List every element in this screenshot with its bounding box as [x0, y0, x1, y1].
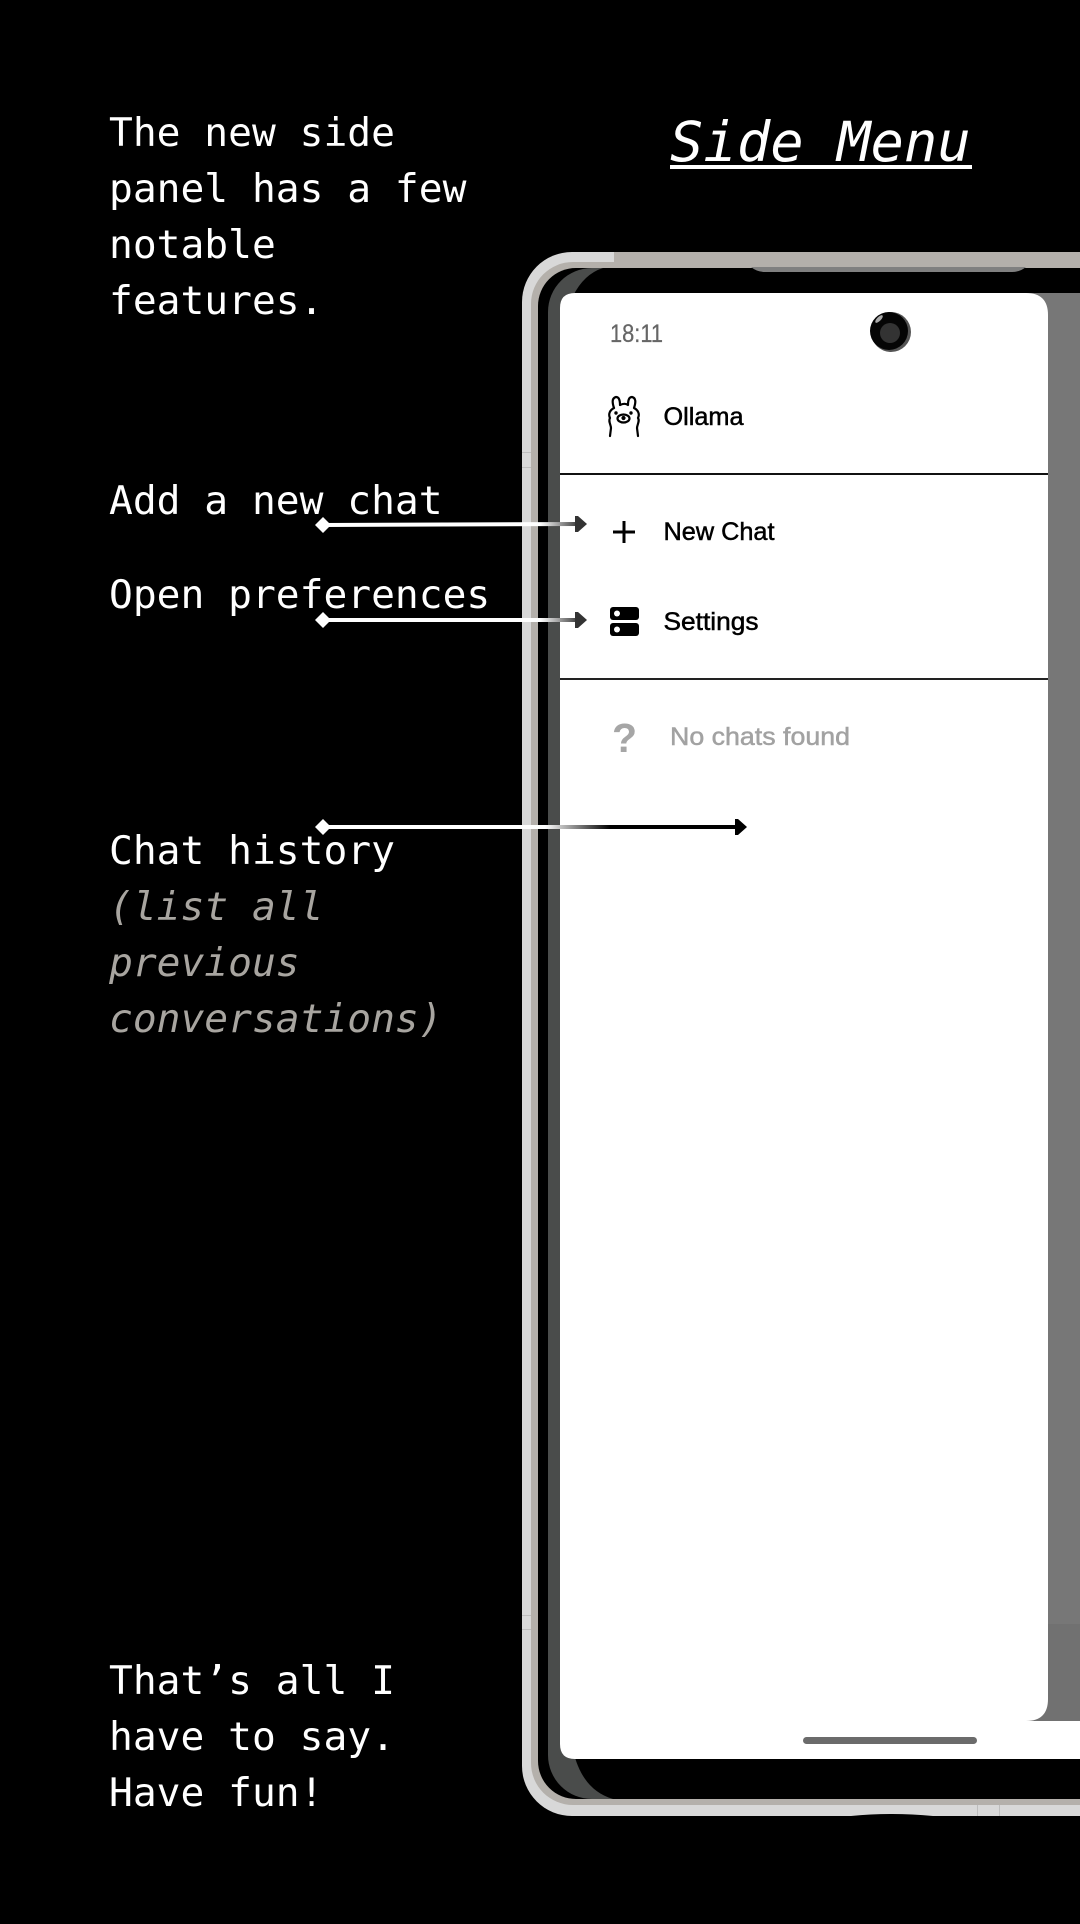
icon: settings [610, 607, 639, 636]
settings label: Settings [664, 608, 758, 636]
home indicator [803, 1737, 977, 1744]
side panel [560, 293, 1048, 1759]
annotation: open preferences: Open preferences [109, 572, 490, 618]
empty state label: No chats found [670, 723, 850, 751]
phone frame [522, 252, 1080, 1816]
divider [560, 473, 1048, 475]
annotation: add a new chat: Add a new chat [109, 478, 443, 524]
status bar time: 18:11 [610, 320, 663, 348]
annotation: chat history: previous [108, 940, 300, 986]
closing text block: have to say. [109, 1714, 395, 1760]
intro text block: features. [109, 278, 323, 324]
annotation: chat history: Chat history [109, 828, 395, 874]
annotation: chat history: conversations) [109, 996, 443, 1042]
title: Side Menu [670, 110, 971, 175]
annotation: chat history: (list all [109, 884, 323, 930]
closing text block: Have fun! [109, 1770, 323, 1816]
icon: llama [609, 397, 639, 436]
icon: camera [870, 312, 911, 352]
arrow: new chat [315, 516, 587, 533]
arrow: settings [315, 612, 587, 628]
intro text block: notable [109, 222, 276, 268]
intro text block: The new side [109, 110, 395, 156]
arrow: chat history [315, 819, 747, 835]
app name: Ollama [664, 403, 744, 431]
phone mockup [522, 252, 1080, 1816]
intro text block: panel has a few [109, 166, 467, 212]
icon: plus [613, 521, 635, 543]
closing text block: That’s all I [109, 1658, 395, 1704]
icon: question mark: ? [612, 715, 637, 761]
divider [560, 678, 1048, 680]
new chat label: New Chat [664, 518, 775, 546]
screen backdrop [1000, 293, 1080, 1759]
